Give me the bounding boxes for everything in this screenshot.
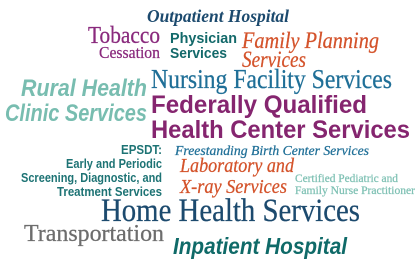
term: Freestanding Birth Center Services: Freestanding Birth Center Services xyxy=(174,144,370,159)
term: Certified Pediatric and Family Nurse Practitioner: Certified Pediatric and xyxy=(295,171,398,185)
term: Rural Health Clinic Services: Rural Health xyxy=(21,75,147,102)
term: Physician Services xyxy=(170,30,237,62)
term: Laboratory and X-ray Services xyxy=(179,155,295,198)
term: Home Health Services: Home Health Services xyxy=(101,193,360,229)
term: Certified Pediatric and Family Nurse Practitioner: Family Nurse Practitioner xyxy=(295,183,415,197)
term: Federally Qualified Health Center Services xyxy=(151,91,410,144)
term: Federally Qualified Health Center Services: Health Center Services xyxy=(151,116,410,144)
term: Outpatient Hospital: Outpatient Hospital xyxy=(147,6,289,26)
term: Tobacco Cessation: Cessation xyxy=(99,43,160,62)
term: EPSDT xyxy=(21,143,162,199)
term: EPSDT: EPSDT: xyxy=(121,143,162,157)
term: EPSDT: Screening, Diagnostic, and xyxy=(21,171,162,185)
term: Rural Health Clinic Services xyxy=(5,75,147,127)
term: Certified Pediatric and Family Nurse Practitioner xyxy=(295,171,415,197)
term: Rural Health Clinic Services: Clinic Services xyxy=(5,100,147,127)
term: Physician Services: Physician xyxy=(170,30,237,47)
term: EPSDT: Treatment Services xyxy=(57,185,162,199)
term: Inpatient Hospital: Inpatient Hospital xyxy=(173,233,348,259)
term: Family Planning Services xyxy=(241,28,379,73)
term: Physician Services: Services xyxy=(170,45,227,62)
term: Transportation: Transportation xyxy=(24,221,164,247)
term: Tobacco Cessation xyxy=(88,23,160,62)
term: Laboratory and X-ray Services: Laboratory and xyxy=(179,155,295,177)
term: Nursing Facility Services: Nursing Facility Services xyxy=(151,64,392,94)
term: Tobacco Cessation: Tobacco xyxy=(88,23,160,49)
term: Laboratory and X-ray Services: X-ray Services xyxy=(179,176,287,198)
term: Family Planning Services: Services xyxy=(242,47,306,73)
term: Federally Qualified Health Center Services: Federally Qualified xyxy=(151,91,367,119)
term: EPSDT: Early and Periodic xyxy=(66,157,162,171)
term: Family Planning Services: Family Planning xyxy=(241,28,379,54)
